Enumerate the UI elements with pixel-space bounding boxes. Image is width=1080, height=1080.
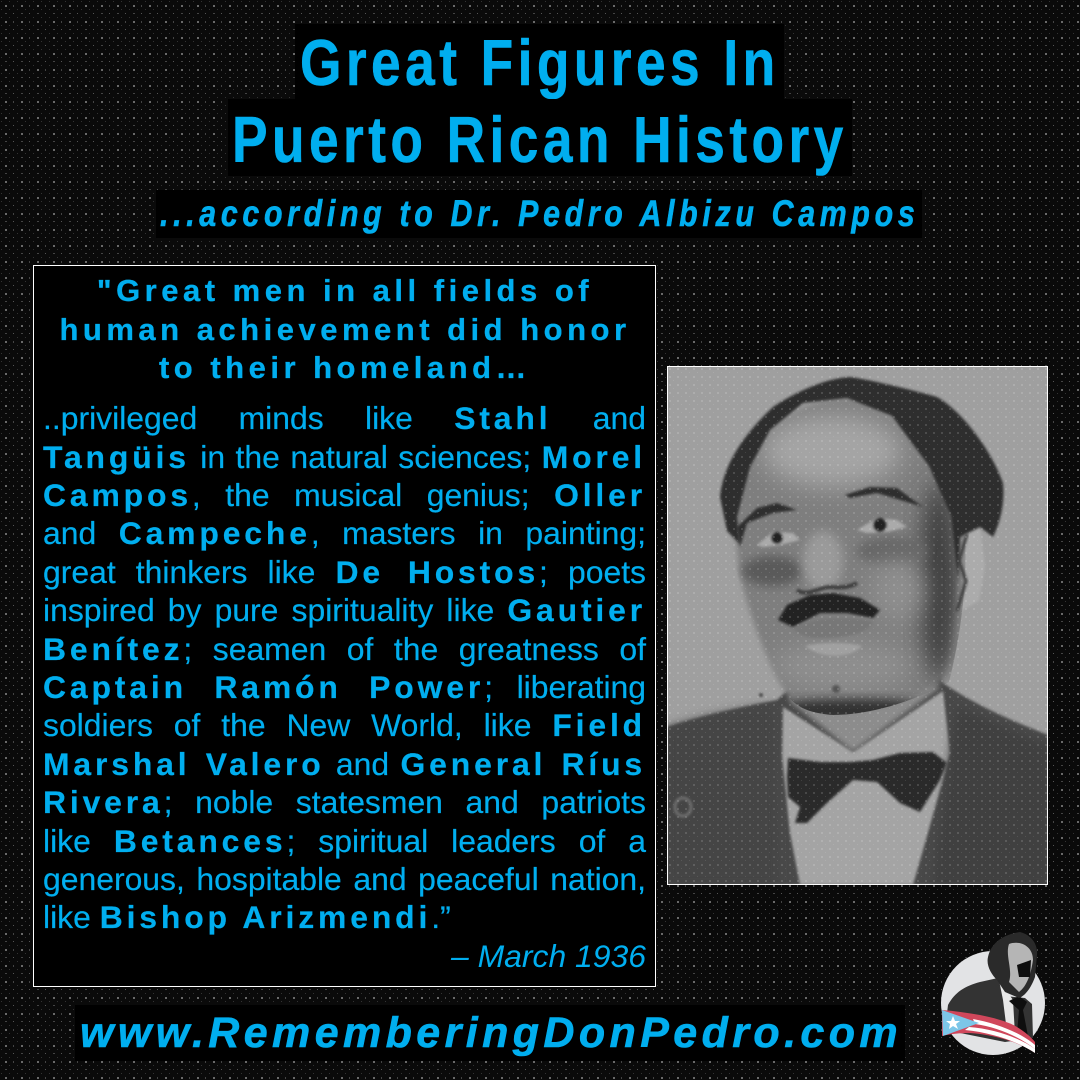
quote body: like Bishop Arizmendi.” bbox=[43, 899, 451, 935]
quote body: soldiers of the New World, like Field bbox=[43, 707, 646, 743]
panel: quote bbox=[33, 265, 656, 987]
ear fold bbox=[957, 534, 967, 611]
quote body: Benítez; seamen of the greatness of bbox=[43, 631, 646, 667]
quote body: generous, hospitable and peaceful nation, bbox=[43, 861, 646, 897]
hair bbox=[720, 377, 1004, 581]
face shading bbox=[742, 415, 957, 723]
logo circle bbox=[941, 951, 1045, 1055]
jacket shading bbox=[667, 706, 779, 885]
quote heading: "Great men in all fields of bbox=[97, 273, 593, 308]
quote heading: human achievement did honor bbox=[59, 312, 631, 347]
quote body: and Campeche, masters in painting; bbox=[43, 515, 646, 551]
quote body: Marshal Valero and General Ríus bbox=[43, 746, 646, 782]
quote body: Captain Ramón Power; liberating bbox=[43, 669, 646, 705]
face bbox=[733, 398, 957, 713]
photo background bbox=[667, 366, 1048, 885]
speaker bbox=[945, 932, 1037, 1042]
title: Puerto Rican History bbox=[232, 103, 848, 176]
ear bbox=[953, 527, 985, 613]
quote body bbox=[43, 400, 646, 935]
eyes, brows, nose and moustache bbox=[737, 487, 923, 696]
quote body: like Betances; spiritual leaders of a bbox=[43, 823, 646, 859]
logo: speaker with flag bbox=[941, 932, 1045, 1055]
quote body: Campos, the musical genius; Oller bbox=[43, 477, 646, 513]
quote body: inspired by pure spirituality like Gautier bbox=[43, 592, 646, 628]
title bbox=[228, 24, 852, 176]
neck bbox=[790, 666, 939, 752]
website url: www.RememberingDonPedro.com bbox=[80, 1009, 902, 1057]
quote heading: to their homeland… bbox=[159, 350, 531, 385]
portrait photo bbox=[667, 366, 1048, 885]
quote body: great thinkers like De Hostos; poets bbox=[43, 554, 646, 590]
shirt bbox=[782, 691, 950, 885]
jacket bbox=[667, 671, 1048, 885]
quote heading bbox=[59, 273, 631, 385]
bow tie bbox=[787, 752, 947, 823]
quote body: Rivera; noble statesmen and patriots bbox=[43, 784, 646, 820]
title: Great Figures In bbox=[300, 26, 780, 98]
flag bbox=[942, 1010, 1035, 1053]
quote body: Tangüis in the natural sciences; Morel bbox=[43, 439, 646, 475]
quote body: ..privileged minds like Stahl and bbox=[43, 400, 646, 436]
subtitle: ...according to Dr. Pedro Albizu Campos bbox=[160, 193, 919, 234]
attribution: – March 1936 bbox=[451, 938, 646, 974]
